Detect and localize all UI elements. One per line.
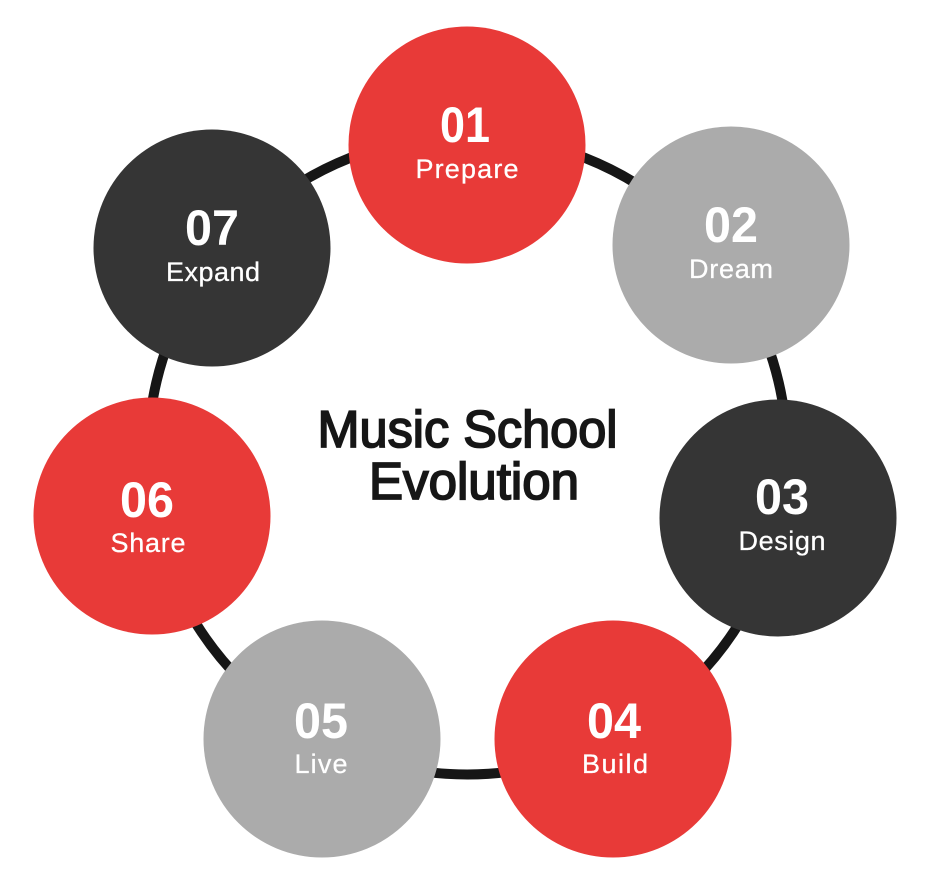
step 06 Share: 06 <box>120 472 174 528</box>
step 04 Build: Build <box>582 749 648 779</box>
step 01 Prepare: Prepare <box>416 154 518 184</box>
step 05 Live: Live <box>294 749 348 779</box>
step 07 Expand: 07 <box>185 200 239 256</box>
step 03 Design: 03 <box>755 469 809 525</box>
step 06 Share: Share <box>110 528 186 558</box>
step 06 Share <box>34 398 270 634</box>
step 02 Dream: 02 <box>704 197 758 253</box>
step 01 Prepare: 01 <box>440 97 490 153</box>
title <box>318 401 618 511</box>
step 01 Prepare <box>348 26 586 264</box>
step 07 Expand: Expand <box>166 257 260 287</box>
connecting ring <box>148 136 787 774</box>
title: Music School <box>318 401 618 459</box>
step 07 Expand <box>94 130 330 366</box>
step 02 Dream <box>612 126 850 364</box>
step 03 Design <box>660 400 896 636</box>
step 04 Build: 04 <box>587 693 641 749</box>
step 04 Build <box>494 620 732 858</box>
step 03 Design: Design <box>738 526 826 556</box>
step 05 Live: 05 <box>294 693 348 749</box>
step 05 Live <box>204 620 440 858</box>
step 02 Dream: Dream <box>689 254 773 284</box>
title: Evolution <box>369 453 579 511</box>
